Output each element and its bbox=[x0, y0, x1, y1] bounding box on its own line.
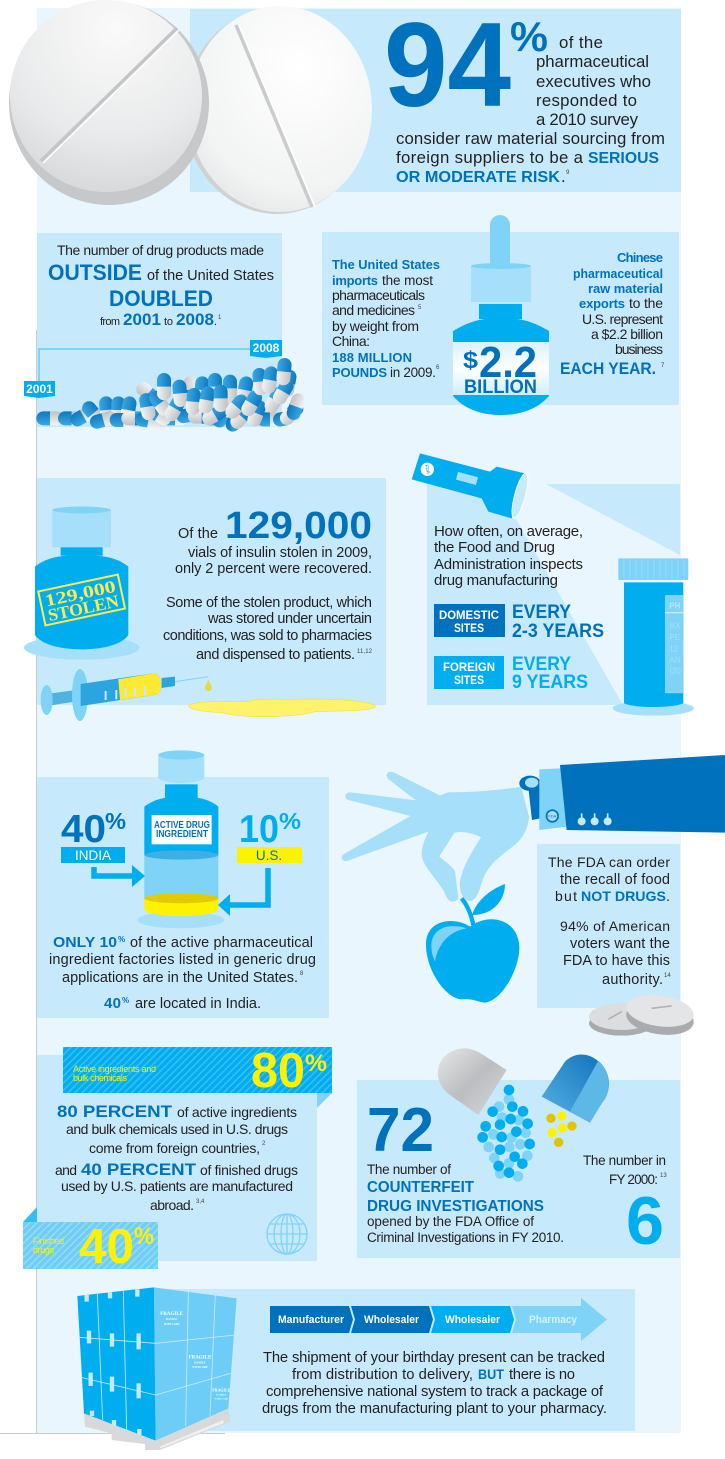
heading text: 1 bbox=[218, 315, 222, 321]
ingredient text: of the active pharmaceutical bbox=[130, 935, 313, 951]
insulin text: conditions, was sold to pharmacies bbox=[163, 628, 372, 644]
tracking text: comprehensive national system to track a package of bbox=[266, 1384, 604, 1400]
tracking text: BUT bbox=[478, 1366, 504, 1382]
sourcing text: 3,4 bbox=[196, 1199, 205, 1205]
survey text: a 2010 survey bbox=[536, 110, 639, 129]
panel: active drug ingredient bbox=[37, 750, 329, 1018]
heading text: 2001 bbox=[123, 310, 161, 329]
tracking text: there is no bbox=[509, 1367, 575, 1383]
bottle label text: INGREDIENT bbox=[156, 829, 208, 840]
icon: large white tablets bbox=[9, 0, 372, 214]
bottle label text: PH bbox=[669, 602, 681, 611]
right text: pharmaceutical bbox=[573, 266, 663, 281]
panel: stolen insulin bbox=[37, 478, 386, 705]
inspection text: How often, on average, bbox=[434, 523, 583, 540]
arrow: U.S. bbox=[218, 868, 268, 916]
left text: 188 MILLION bbox=[332, 350, 412, 365]
foreign sites bbox=[434, 654, 588, 693]
insulin text: only 2 percent were recovered. bbox=[175, 561, 372, 577]
bottle label text bbox=[463, 338, 537, 398]
panel: drug products doubled bbox=[24, 233, 282, 427]
tracking text bbox=[262, 1350, 607, 1417]
trend line bbox=[39, 349, 252, 382]
left text: in 2009. bbox=[390, 365, 436, 380]
carton labels bbox=[160, 1312, 231, 1400]
sourcing text: and bbox=[55, 1162, 77, 1178]
survey text bbox=[396, 33, 665, 186]
inspection text: Administration inspects bbox=[434, 556, 583, 573]
banner: 40 percent: drugs bbox=[33, 1245, 54, 1255]
tracking text: The shipment of your birthday present can be tracked bbox=[263, 1350, 605, 1366]
sourcing text: come from foreign countries, bbox=[89, 1140, 260, 1156]
icon: flashlight bbox=[412, 453, 531, 520]
column edge line bbox=[0, 330, 225, 1434]
supply chain arrow: Wholesaler bbox=[364, 1314, 420, 1326]
panel: 94 percent survey bbox=[190, 0, 681, 192]
stat: 72: 72 bbox=[367, 1096, 434, 1165]
ingredient text: 8 bbox=[300, 971, 304, 977]
heading text: OUTSIDE bbox=[48, 260, 142, 285]
right text: U.S. represent bbox=[582, 311, 663, 327]
panel: imports from China bbox=[322, 232, 679, 405]
ingredient text bbox=[49, 934, 316, 1012]
heading text: The number of drug products made bbox=[57, 242, 264, 258]
banner: 80 percent: % bbox=[305, 1050, 327, 1077]
survey text: executives who bbox=[536, 72, 651, 91]
stat: 6: 6 bbox=[626, 1183, 664, 1259]
icon: dropper bottle $2.2 billion bbox=[453, 215, 549, 415]
bottle label text: 12 bbox=[669, 644, 679, 653]
sourcing text: 80 PERCENT bbox=[57, 1103, 172, 1121]
domestic sites: SITES bbox=[454, 623, 484, 635]
inspection text bbox=[434, 523, 583, 589]
carton labels: HANDLE bbox=[194, 1361, 206, 1364]
bottle label text: $ bbox=[463, 347, 479, 374]
left text: pharmaceuticals bbox=[332, 287, 425, 303]
left text: 6 bbox=[436, 365, 440, 371]
apple bbox=[426, 884, 519, 1003]
bottle label text: ACTIVE DRUG bbox=[154, 820, 210, 831]
bottle label text bbox=[665, 602, 683, 675]
bottle label text: BILLION bbox=[464, 377, 537, 398]
bottle label text: 2.2 bbox=[479, 338, 537, 387]
recall text: 94% of American bbox=[560, 918, 670, 934]
insulin text: and dispensed to patients. bbox=[196, 647, 355, 663]
banner: 80 percent: bulk chemicals bbox=[73, 1073, 128, 1083]
ingredient text: applications are in the United States. bbox=[62, 970, 298, 986]
icon: globe bbox=[267, 1214, 307, 1254]
counterfeit text: opened by the FDA Office of bbox=[367, 1214, 534, 1229]
supply chain arrow bbox=[270, 1298, 607, 1341]
insulin text: 129,000 bbox=[225, 505, 372, 547]
banner: 80 percent: 80 bbox=[251, 1044, 305, 1098]
supply chain arrow: Wholesaler bbox=[445, 1314, 501, 1326]
panel: foreign ingredients bbox=[23, 1044, 332, 1274]
stat: 10 percent U.S.: U.S. bbox=[256, 848, 282, 863]
survey text: of the bbox=[559, 33, 603, 52]
insulin text: vials of insulin stolen in 2009, bbox=[188, 545, 372, 561]
panel: FDA recall bbox=[537, 844, 680, 1008]
sourcing text: 40 PERCENT bbox=[81, 1161, 196, 1179]
left text: by weight from bbox=[332, 318, 419, 334]
foreign sites: 9 YEARS bbox=[512, 672, 588, 693]
survey text: foreign suppliers to be a bbox=[396, 148, 584, 167]
stat: 94 percent: % bbox=[510, 13, 548, 60]
counterfeit text: The number of bbox=[367, 1162, 451, 1177]
icon: flashlight: FDA bbox=[424, 464, 431, 475]
label: 2008: 2008 bbox=[253, 341, 280, 355]
supply chain arrow: Manufacturer bbox=[278, 1314, 345, 1326]
survey text: SERIOUS bbox=[588, 150, 659, 167]
banner: 40 percent: Finished bbox=[33, 1236, 64, 1246]
recall text: voters want the bbox=[570, 936, 670, 952]
stamp: 129,000 stolen: 129,000 bbox=[43, 577, 117, 610]
heading text: . bbox=[214, 316, 217, 328]
ingredient text: 40 bbox=[104, 995, 121, 1012]
bottle label text: PE bbox=[669, 633, 680, 642]
sleeve bbox=[519, 755, 725, 833]
stat: 40 percent India bbox=[61, 808, 126, 863]
recall text: The FDA can order bbox=[548, 854, 670, 870]
carton labels: WITH CARE bbox=[164, 1323, 180, 1326]
stat: 40 percent India: % bbox=[105, 808, 126, 834]
bottle label text bbox=[154, 820, 210, 840]
icon: shipping pallet bbox=[77, 1287, 237, 1450]
carton labels: FRAGILE bbox=[160, 1312, 184, 1317]
sourcing text: abroad. bbox=[150, 1197, 194, 1213]
heading text: DOUBLED bbox=[109, 286, 213, 311]
right text: Chinese bbox=[617, 250, 663, 265]
inspection text: drug manufacturing bbox=[434, 572, 558, 589]
stat: 6: FY 2000: bbox=[609, 1172, 658, 1187]
left carton face bbox=[77, 1287, 156, 1441]
right text: 7 bbox=[661, 363, 665, 369]
carton labels: WITH CARE bbox=[214, 1397, 229, 1400]
bottle label text: RX bbox=[669, 621, 681, 630]
label: 2008 bbox=[250, 340, 282, 358]
right text: exports bbox=[579, 296, 625, 311]
heading text: 2008 bbox=[176, 310, 214, 329]
left text: China: bbox=[332, 333, 370, 349]
stat: 6: The number in bbox=[583, 1153, 666, 1168]
banner: 40 percent bbox=[23, 1220, 158, 1274]
banner: 40 percent: 40 bbox=[79, 1220, 134, 1274]
bottle label text: (20 bbox=[669, 666, 681, 675]
panel: FDA inspections bbox=[427, 473, 680, 705]
sourcing text: of active ingredients bbox=[177, 1104, 297, 1120]
light beam bbox=[515, 473, 680, 705]
bottle label text: AN bbox=[669, 656, 681, 665]
carton labels: WITH CARE bbox=[192, 1366, 208, 1369]
right text: business bbox=[615, 341, 663, 357]
carton labels: FRAGILE bbox=[212, 1388, 231, 1393]
stat: 10 percent U.S. bbox=[237, 808, 302, 863]
icon: pill bottle bbox=[613, 558, 694, 716]
sourcing text: of finished drugs bbox=[200, 1162, 298, 1178]
sourcing text: used by U.S. patients are manufactured bbox=[61, 1178, 293, 1194]
supply chain arrow: Pharmacy bbox=[529, 1314, 578, 1326]
right text: raw material bbox=[588, 281, 663, 296]
recall text: FDA to have this bbox=[563, 953, 670, 969]
left text bbox=[332, 257, 440, 380]
carton labels: HANDLE bbox=[216, 1394, 227, 1397]
banner fold bbox=[317, 1093, 332, 1108]
sourcing text: and bulk chemicals used in U.S. drugs bbox=[66, 1121, 288, 1137]
recall text: 14 bbox=[664, 973, 671, 979]
right text: EACH YEAR. bbox=[560, 359, 656, 378]
tracking text: drugs from the manufacturing plant to your pharmacy. bbox=[262, 1401, 607, 1417]
banner fold bbox=[23, 1207, 37, 1222]
stamp: 129,000 stolen bbox=[38, 575, 125, 626]
stat: 10 percent U.S.: % bbox=[279, 808, 301, 834]
recall text: the recall of food bbox=[560, 872, 670, 888]
left text: 5 bbox=[418, 305, 422, 311]
left text: imports bbox=[332, 273, 378, 288]
insulin text: 11,12 bbox=[357, 649, 373, 655]
heading text: of the United States bbox=[147, 268, 274, 284]
tracking text: from distribution to delivery, bbox=[292, 1367, 473, 1383]
icon: opened capsule with granules bbox=[438, 1048, 609, 1182]
sourcing text bbox=[55, 1103, 298, 1213]
heading text: from bbox=[100, 316, 120, 328]
stat: 6 bbox=[583, 1153, 667, 1259]
insulin text bbox=[163, 505, 373, 663]
ingredient text: ONLY 10 bbox=[53, 934, 117, 951]
label: 2001: 2001 bbox=[26, 382, 53, 396]
left text: The United States bbox=[332, 257, 440, 272]
right text: to the bbox=[629, 295, 663, 311]
foreign sites: EVERY bbox=[512, 654, 571, 675]
icon: ingredient bottle bbox=[137, 750, 224, 928]
panel: counterfeit investigations bbox=[357, 1048, 680, 1259]
stat: 94 percent: 94 bbox=[384, 0, 511, 132]
recall text bbox=[548, 854, 671, 988]
left text: and medicines bbox=[332, 302, 415, 318]
recall text: . bbox=[666, 888, 670, 904]
ingredient text: % bbox=[118, 935, 125, 944]
survey text: . bbox=[561, 167, 566, 186]
domestic sites: DOMESTIC bbox=[439, 610, 499, 622]
counterfeit text: COUNTERFEIT bbox=[367, 1179, 475, 1196]
domestic sites: 2-3 YEARS bbox=[512, 621, 604, 642]
carton labels: FRAGILE bbox=[189, 1356, 212, 1361]
icon: hand holding apple bbox=[343, 755, 725, 1003]
ingredient text: are located in India. bbox=[135, 996, 261, 1012]
icon: small grey tablets bbox=[589, 991, 696, 1039]
insulin text: Some of the stolen product, which bbox=[166, 595, 372, 611]
insulin text: Of the bbox=[178, 526, 218, 542]
ingredient text: % bbox=[122, 996, 129, 1005]
recall text: NOT DRUGS bbox=[581, 888, 666, 904]
recall text: but bbox=[555, 888, 577, 904]
icon: syringe and spill bbox=[41, 669, 376, 721]
arrow: India bbox=[94, 865, 145, 887]
icon: stolen insulin bottle bbox=[24, 506, 139, 660]
stat: 40 percent India: INDIA bbox=[75, 848, 111, 863]
right carton face bbox=[154, 1287, 237, 1441]
banner: 80 percent bbox=[63, 1044, 332, 1098]
carton labels: HANDLE bbox=[166, 1318, 178, 1321]
domestic sites: EVERY bbox=[512, 602, 571, 623]
heading text: to bbox=[164, 316, 173, 328]
counterfeit text: DRUG INVESTIGATIONS bbox=[367, 1198, 544, 1215]
survey text: OR MODERATE RISK bbox=[396, 169, 560, 186]
left text: POUNDS bbox=[332, 365, 387, 380]
right text bbox=[560, 250, 665, 378]
banner: 40 percent: % bbox=[134, 1223, 154, 1250]
left text: the most bbox=[382, 273, 433, 288]
chart: capsule pile bbox=[36, 357, 307, 434]
counterfeit text: Criminal Investigations in FY 2010. bbox=[367, 1230, 564, 1245]
survey text: pharmaceutical bbox=[536, 52, 649, 71]
panel: supply chain tracking bbox=[130, 1289, 635, 1431]
stat: 40 percent India: 40 bbox=[61, 808, 106, 851]
pallet base bbox=[84, 1408, 231, 1450]
survey text: 9 bbox=[566, 170, 570, 176]
counterfeit text bbox=[367, 1162, 564, 1245]
stat: 6: 13 bbox=[660, 1173, 667, 1179]
survey text: consider raw material sourcing from bbox=[396, 129, 665, 148]
sleeve: FDA bbox=[548, 814, 557, 819]
inspection text: the Food and Drug bbox=[434, 539, 555, 556]
survey text: responded to bbox=[536, 91, 637, 110]
sourcing text: 2 bbox=[262, 1141, 266, 1147]
stamp: 129,000 stolen: STOLEN bbox=[46, 591, 121, 625]
foreign sites: FOREIGN bbox=[443, 662, 495, 674]
stat: 10 percent U.S.: 10 bbox=[239, 808, 279, 851]
right text: a $2.2 billion bbox=[591, 326, 663, 342]
ingredient text: ingredient factories listed in generic drug bbox=[49, 952, 316, 968]
recall text: authority. bbox=[602, 972, 663, 988]
hand bbox=[343, 773, 527, 900]
domestic sites bbox=[434, 602, 604, 642]
heading text bbox=[48, 242, 274, 329]
banner: 80 percent: Active ingredients and bbox=[73, 1064, 156, 1074]
insulin text: was stored under uncertain bbox=[207, 611, 372, 627]
foreign sites: SITES bbox=[454, 675, 484, 687]
